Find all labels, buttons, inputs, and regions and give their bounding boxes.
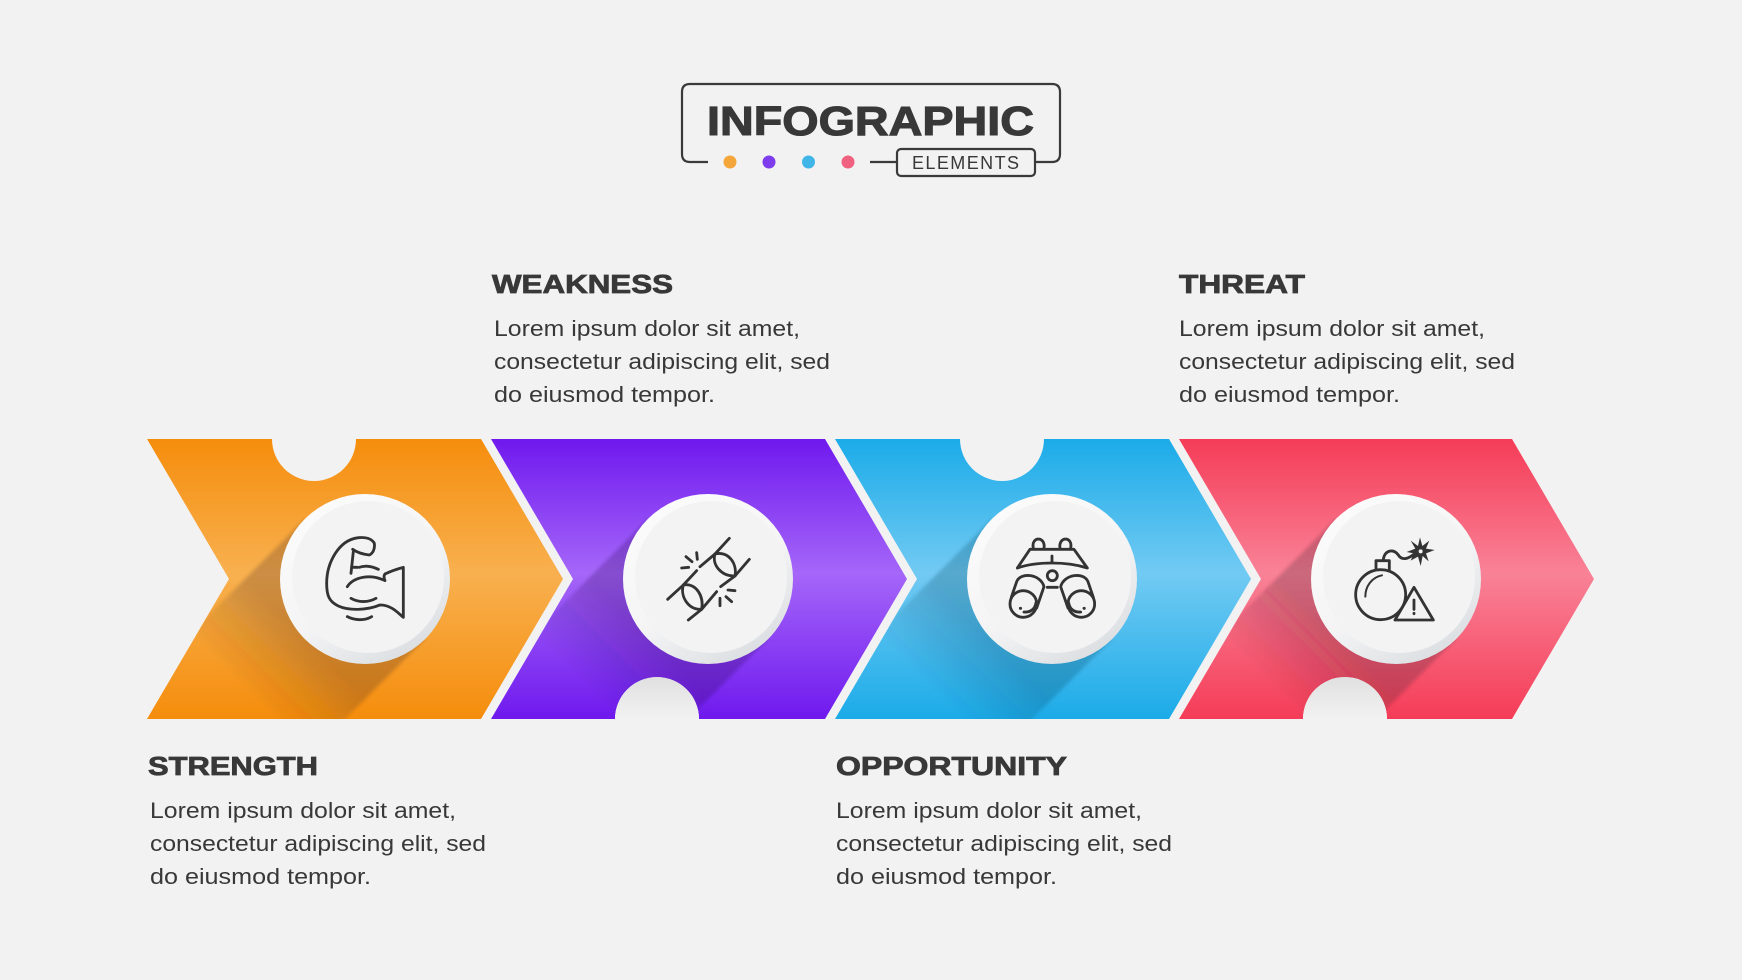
white disc: [280, 494, 450, 664]
colour dots: [724, 156, 854, 168]
text block: weakness: do eiusmod tempor.: [494, 382, 715, 407]
long shadow: [1233, 518, 1457, 710]
long shadow: [544, 519, 769, 710]
white disc: [623, 494, 793, 664]
title frame: [682, 84, 1060, 162]
purple chevron: [491, 439, 907, 719]
icon: flexed muscle: [327, 538, 403, 620]
panel: threat arrow: [1179, 439, 1594, 719]
notch shade: [615, 677, 699, 719]
icon: bomb with warning: [1356, 537, 1435, 620]
text block: opportunity: consectetur adipiscing elit, sed: [836, 831, 1172, 856]
icon: broken chain: [668, 538, 749, 620]
text block: threat: [1179, 269, 1515, 407]
text block: opportunity: do eiusmod tempor.: [836, 864, 1057, 889]
title badge: [682, 84, 1060, 176]
red chevron: [1179, 439, 1594, 719]
text block: strength: consectetur adipiscing elit, sed: [150, 831, 486, 856]
white disc: [967, 494, 1137, 664]
text block: strength: STRENGTH: [148, 751, 318, 781]
blue chevron: [835, 439, 1251, 719]
text block: opportunity: OPPORTUNITY: [836, 751, 1067, 781]
panel: weakness arrow: [491, 439, 907, 719]
text block: threat: consectetur adipiscing elit, sed: [1179, 349, 1515, 374]
text block: opportunity: Lorem ipsum dolor sit amet,: [836, 798, 1142, 823]
text block: threat: do eiusmod tempor.: [1179, 382, 1400, 407]
text block: weakness: Lorem ipsum dolor sit amet,: [494, 316, 800, 341]
notch shade: [1303, 677, 1387, 719]
icon: binoculars: [1010, 539, 1095, 617]
title text: INFOGRAPHIC: [707, 98, 1034, 144]
text block: strength: do eiusmod tempor.: [150, 864, 371, 889]
panel: opportunity arrow: [835, 439, 1251, 719]
text block: threat: THREAT: [1179, 269, 1305, 299]
text block: weakness: [492, 269, 830, 407]
long shadow: [200, 518, 426, 719]
text block: weakness: consectetur adipiscing elit, sed: [494, 349, 830, 374]
text block: threat: Lorem ipsum dolor sit amet,: [1179, 316, 1485, 341]
subtitle box: [897, 149, 1035, 176]
text block: opportunity: [836, 751, 1172, 889]
text block: strength: Lorem ipsum dolor sit amet,: [150, 798, 456, 823]
long shadow: [892, 518, 1112, 719]
subtitle box: ELEMENTS: [912, 153, 1019, 173]
orange chevron: [147, 439, 563, 719]
panel: strength arrow: [147, 439, 563, 719]
text block: weakness: WEAKNESS: [492, 269, 673, 299]
text block: strength: [148, 751, 486, 889]
white disc: [1311, 494, 1481, 664]
